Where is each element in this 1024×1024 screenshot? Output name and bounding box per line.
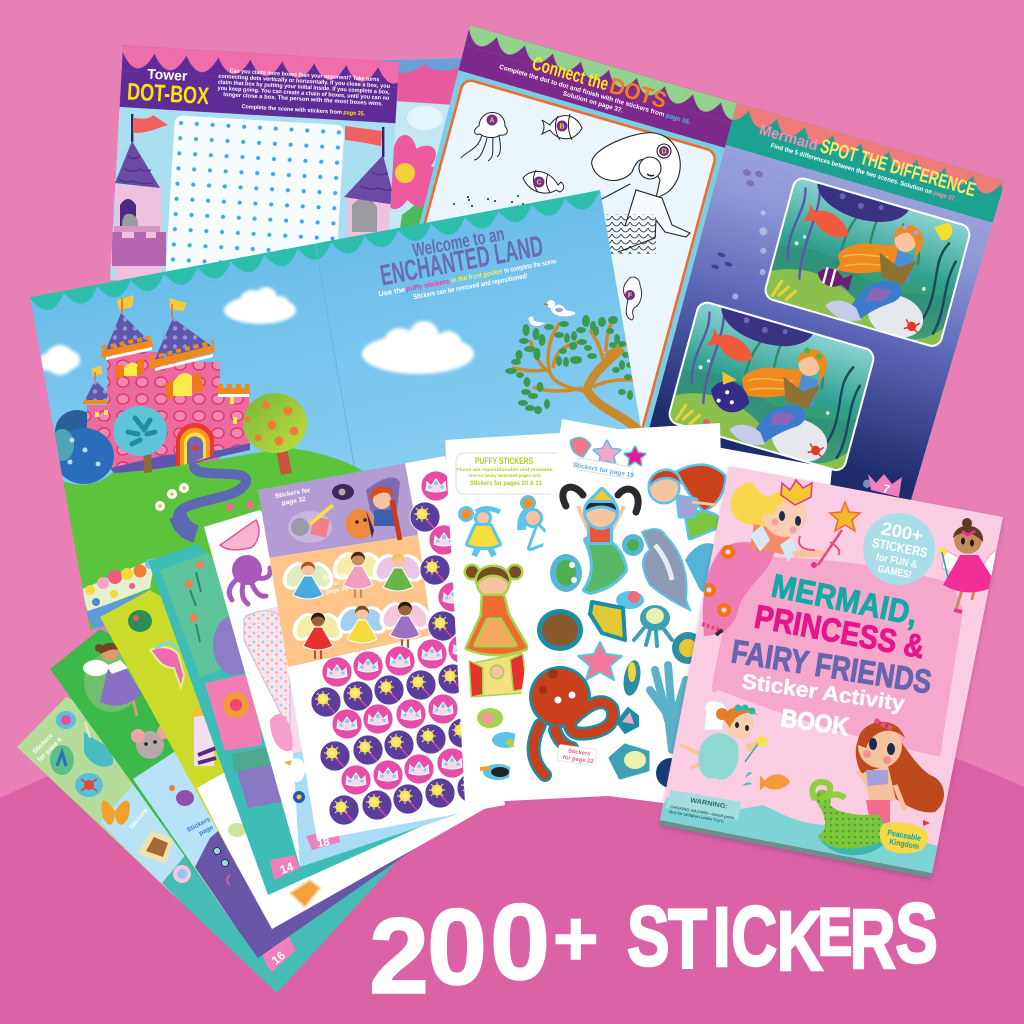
badge: 200+ stickers: 200+ <box>880 518 925 546</box>
sticker label: page 36 <box>325 586 349 596</box>
panel: ocean sticker sheet <box>500 410 840 830</box>
sticker: mermaid with black pigtails <box>563 487 638 592</box>
sticker labels: Stickers <box>128 807 150 831</box>
instructions text <box>216 68 391 119</box>
page number 16: 16 <box>269 948 288 968</box>
teal wave bottom <box>650 797 945 880</box>
line art: fish C: C <box>536 180 542 186</box>
heading: Tower DOT-BOX: DOT-BOX <box>126 78 210 110</box>
sticker: snail, bird, toucan <box>477 708 520 780</box>
sticker label: page <box>198 824 215 837</box>
sticker: dolphin <box>642 529 722 610</box>
line art: fish B <box>542 114 582 140</box>
panel: fan sheet lime white <box>90 580 520 940</box>
badge: 200+ stickers: for FUN & <box>875 551 919 571</box>
heading: Welcome to an Enchanted Land <box>380 230 542 286</box>
illustration: fairy with teal dress <box>680 701 770 780</box>
label: puffy stickers: PUFFY STICKERS <box>475 456 533 467</box>
stickers: shells and stars <box>571 438 645 465</box>
panel: fan sheet green blue purple <box>40 620 520 970</box>
sticker: pink flower tile <box>205 672 262 751</box>
sticker: princess <box>466 566 527 654</box>
label: puffy stickers: These are repositionable and reusable. <box>456 467 554 473</box>
warning box: Not for children under 3 yrs. <box>669 809 725 824</box>
book page edges <box>660 820 932 878</box>
round stickers: tiaras and wands <box>311 471 487 825</box>
label: puffy stickers: Stickers for pages 20 & 21 <box>470 481 543 487</box>
illustration: fairy with pink dress <box>938 518 997 612</box>
sticker: red octopus <box>529 666 613 775</box>
instructions text: you keep going. You can create a chain of boxes, until you can no <box>217 86 390 102</box>
panel: welcome to an enchanted land spread <box>30 190 641 630</box>
badge: 200+ stickers: STICKERS <box>871 535 929 560</box>
dot-to-dot board <box>424 79 716 428</box>
heading: Welcome to an Enchanted Land: ENCHANTED LAND <box>378 230 545 293</box>
illustration: flower border <box>82 558 155 629</box>
warning box: CHOKING HAZARD—Small parts. <box>670 804 736 820</box>
panel: round and fairy sticker sheet <box>250 450 520 850</box>
heading: Connect the DOTS: Connect the <box>530 52 611 95</box>
label: puffy stickers: Use on heavy laminated pages only <box>469 473 541 479</box>
sticker label: Stickers for <box>275 487 311 500</box>
title: 200+ STICKERS: R <box>850 891 896 986</box>
heading: Tower DOT-BOX <box>128 68 209 104</box>
heading: Welcome to an Enchanted Land: Welcome to an <box>411 224 506 262</box>
panel: fan sheet green blue teal <box>17 697 398 993</box>
icon: flower <box>390 135 436 210</box>
illustration: tree with birds <box>505 300 640 432</box>
sticker label: Stickers for <box>186 811 221 834</box>
label: stickers for page 19: Stickers for page 19 <box>572 462 635 479</box>
illustration: small orange fish <box>742 772 790 790</box>
sticker label: for <box>331 580 341 588</box>
sticker: mermaid tail pink <box>270 714 293 751</box>
illustration: mermaid <box>812 720 944 855</box>
stickers: fairies <box>277 547 436 659</box>
logo: Peaceable Kingdom: Kingdom <box>889 837 920 851</box>
logo: Peaceable Kingdom: Peaceable <box>887 828 922 843</box>
warning box: WARNING: <box>690 797 728 811</box>
panel: puffy sticker sheet <box>440 420 740 810</box>
page number 14: 14 <box>278 859 296 877</box>
panel: connect the dots and spot the difference spread <box>419 25 1005 500</box>
instructions text: connecting dots vertically or horizontally. If you close a box, you <box>218 74 391 90</box>
subtitle: Sticker Activity Book <box>740 670 906 741</box>
illustration: meadow flowers <box>155 483 254 511</box>
sticker: sprinkle heart <box>244 611 292 730</box>
label: puffy stickers <box>456 453 568 494</box>
line art: seahorse <box>624 277 642 320</box>
icon: right tower <box>344 126 392 238</box>
title: MERMAID, PRINCESS & FAIRY FRIENDS: MERMAID, <box>769 567 921 632</box>
sticker: octopus <box>229 555 270 604</box>
sticker: bird and flower <box>284 758 305 803</box>
page number 14 <box>270 855 300 880</box>
heading: Mermaid SPOT THE DIFFERENCE: Mermaid <box>757 121 820 155</box>
icon: green stalks <box>400 188 428 228</box>
sticker: mouse <box>131 725 171 759</box>
illustration: princess <box>702 480 826 636</box>
scene: bottom mermaid <box>667 298 876 474</box>
line art: fish C <box>523 170 564 193</box>
instructions text: in the front pocket <box>451 268 504 285</box>
sticker: snail <box>616 591 644 609</box>
subheading text: Solution on page 37. <box>562 90 624 115</box>
logo: Peaceable Kingdom <box>880 820 930 854</box>
subheading text: Find the 5 differences between the two scenes. Solution on page 37. <box>770 142 957 203</box>
panel: fan sheet teal <box>140 540 490 900</box>
sticker: fish <box>169 785 194 806</box>
illustration: blue bush <box>50 428 114 484</box>
clouds <box>39 287 474 375</box>
stickers: castle characters <box>288 478 400 543</box>
line art: dot-to-dot scatter <box>453 195 524 207</box>
title: MERMAID, PRINCESS & FAIRY FRIENDS <box>729 567 934 701</box>
badge: 200+ stickers: GAMES! <box>877 563 912 581</box>
sticker label: Stickers <box>323 572 347 582</box>
sticker: window girl <box>470 654 526 696</box>
instructions text: Can you claim more boxes than your opponent? Take turns <box>229 68 380 83</box>
heading: Mermaid SPOT THE DIFFERENCE <box>759 124 976 196</box>
sticker label <box>323 572 349 596</box>
sticker: red-haired mermaid <box>650 466 724 538</box>
page number crown 7: 7 <box>881 481 892 497</box>
subtitle: Sticker Activity Book: BOOK <box>779 704 850 741</box>
title: 200+ STICKERS: + <box>553 894 599 982</box>
panel: fan sheet white pink blue <box>195 500 520 880</box>
creature face <box>214 848 230 885</box>
instructions text: Complete the scene with stickers from page 25. <box>241 104 366 118</box>
sticker: garden patch <box>160 551 257 677</box>
title: 200+ STICKERS: 0 <box>490 881 550 1002</box>
sticker labels <box>32 732 150 831</box>
bubbles and fish decorations <box>711 169 870 488</box>
title: 200+ STICKERS: 0 <box>427 886 487 1007</box>
scene: top mermaid <box>763 174 972 350</box>
page number crown 7 <box>868 474 902 497</box>
panel: spot the difference page <box>649 102 1005 500</box>
heading: Connect the DOTS <box>532 57 666 108</box>
line art: seahorse: F <box>628 292 633 300</box>
stickers: frogs <box>550 534 644 592</box>
illustration: river path <box>178 463 246 518</box>
label: stickers for page 22: Stickers <box>568 748 591 758</box>
label: stickers for page 22 <box>557 744 597 766</box>
sticker: fairy with purple dress <box>83 643 142 716</box>
illustration: castle <box>55 295 250 475</box>
line art: jellyfish: A <box>489 118 495 124</box>
title: MERMAID, PRINCESS & FAIRY FRIENDS: PRINCESS & <box>752 598 928 665</box>
cover banner <box>712 557 963 757</box>
title: MERMAID, PRINCESS & FAIRY FRIENDS: FAIRY FRIENDS <box>729 632 934 701</box>
sticker labels: Stickers <box>32 732 55 755</box>
title: 200+ STICKERS: K <box>777 893 823 988</box>
illustration: grass hill <box>63 448 364 630</box>
line art: fish B: B <box>559 124 565 130</box>
title: 200+ STICKERS: S <box>627 888 670 983</box>
line art: mermaid: D <box>661 148 667 156</box>
illustration: fruit tree <box>243 393 307 475</box>
stickers <box>128 610 320 907</box>
stickers: sea creatures <box>537 602 704 788</box>
instructions text: puffy stickers <box>406 278 450 293</box>
panel: book cover <box>650 460 1010 880</box>
line art: mermaid <box>592 133 690 254</box>
title: 200+ STICKERS: C <box>731 888 777 983</box>
illustration: star wand <box>799 502 860 568</box>
sticker: fairy with yellow dress <box>461 508 500 556</box>
sticker label: page 32 <box>281 496 307 507</box>
title: 200+ STICKERS <box>369 881 938 1016</box>
warning box <box>665 790 741 824</box>
instructions text: to complete the scene. <box>504 258 558 275</box>
instructions text: Stickers can be removed and repositioned! <box>413 273 528 301</box>
instructions text: claim that box by putting your initial inside. If you complete a box, <box>218 80 390 96</box>
line art: jellyfish <box>461 112 507 161</box>
title: 200+ STICKERS: E <box>818 893 852 970</box>
sticker: mermaid tail <box>220 520 259 550</box>
sticker labels: for page 4 <box>36 736 64 763</box>
heading: Connect the DOTS: DOTS <box>607 73 669 113</box>
panel: flower page behind <box>380 58 462 230</box>
sticker: fairy with red hair <box>522 498 552 548</box>
panel: tower dot-box page <box>110 45 399 280</box>
page number 18: 18 <box>316 836 331 850</box>
stickers <box>50 711 191 883</box>
subtitle: Sticker Activity Book: Sticker Activity <box>740 670 906 716</box>
title: 200+ STICKERS: T <box>668 891 707 986</box>
page number 18 <box>306 829 340 850</box>
instructions text <box>378 260 558 299</box>
title: 200+ STICKERS: I <box>713 889 731 984</box>
sticker: purple patch <box>232 745 292 808</box>
dot grid board <box>166 116 344 272</box>
instructions text: Use the <box>378 287 406 299</box>
instructions text: longer close a box. The person with the most boxes wins. <box>223 92 383 108</box>
title: 200+ STICKERS: 2 <box>369 895 429 1016</box>
label: stickers for page 22: for page 22 <box>562 755 594 765</box>
illustration: teal tree <box>113 406 167 473</box>
heading: Tower DOT-BOX: Tower <box>147 66 188 84</box>
sticker label <box>275 487 311 507</box>
badge: 200+ stickers <box>863 513 935 585</box>
subheading text: Complete the dot to dot and finish with the stickers from page 16. <box>498 64 692 126</box>
title: 200+ STICKERS: S <box>895 885 938 980</box>
icon: left tower <box>112 114 168 286</box>
page number 16 <box>262 935 296 972</box>
